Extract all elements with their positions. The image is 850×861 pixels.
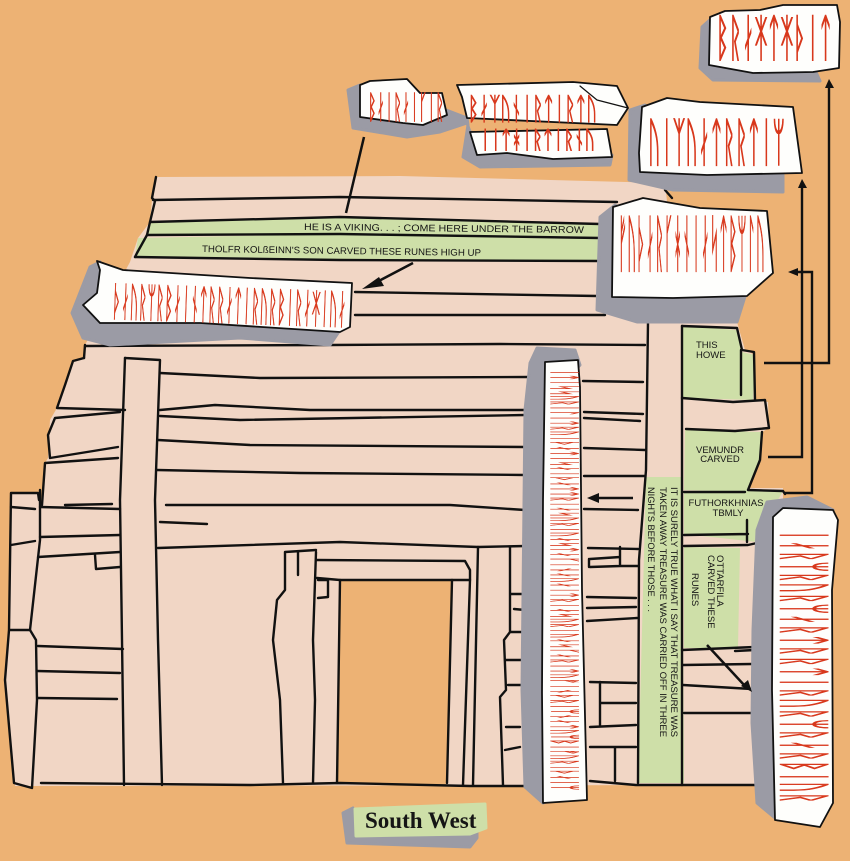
- arrow: centre stone: [587, 493, 633, 503]
- label: vemundr carved: CARVED: [700, 454, 740, 465]
- label: ottarfila: OTTARFILA: [714, 555, 725, 607]
- label: long vertical inscription: NIGHTS BEFORE THOSE . . .: [645, 487, 656, 612]
- label: vemundr carved: VEMUNDR: [696, 445, 744, 456]
- wall outline drawing: [5, 177, 785, 788]
- wall: South West elevation: [5, 176, 783, 786]
- label: long vertical inscription: IT IS SURELY TRUE WHAT I SAY THAT TREASURE WAS: [668, 487, 679, 737]
- label: ottarfila: CARVED THESE: [705, 555, 716, 629]
- arrow: ottarfila: [707, 645, 752, 692]
- text: ᛒᛅᛁᚱᛅᛁᚴᛁᚱ: [368, 88, 444, 126]
- arrow: vemundr stone: [768, 179, 807, 457]
- rune stone: small upper: [360, 79, 447, 126]
- door opening: [337, 580, 451, 785]
- label: this howe: THIS: [696, 340, 718, 351]
- rune stone: broken upper: ᛁᛁᛏᚼᛁᚱᛏᛁᚱᚾᚢ: [480, 126, 595, 154]
- rune stone: broken upper: ᛒᛅᛉᚢᚾᛁᚱᛏᛁᚱᛏᚢ: [468, 92, 597, 127]
- inscription: viking: HE IS A VIKING. . . ; COME HERE UNDER THE BARROW: [304, 222, 584, 236]
- green band: viking: [147, 217, 610, 238]
- green panel: this howe: [683, 326, 755, 400]
- rune stone: vemundr: [639, 98, 802, 175]
- green panel: futhork: [684, 490, 783, 542]
- label: ottarfila: RUNES: [689, 573, 700, 606]
- arrow: tholfr: [362, 263, 413, 289]
- caption: South West: [355, 804, 486, 836]
- green panel: long inscription: [638, 477, 684, 783]
- label: long vertical inscription: TAKEN AWAY TREASURE WAS CARRIED OFF IN THREE: [657, 487, 668, 737]
- label: futhork: FUTHORKHNIAS: [689, 498, 763, 509]
- caption: South West: South West: [365, 808, 477, 833]
- inscription: tholfr: THOLFR KOLßEINN'S SON CARVED THESE RUNES HIGH UP: [202, 244, 481, 259]
- green band: tholfr: [135, 234, 610, 261]
- green panel: ottarfila: [684, 547, 740, 648]
- label: this howe: HOWE: [696, 350, 726, 361]
- rune stone: broken upper: [457, 82, 628, 159]
- rune stone: tholfr: [83, 261, 352, 333]
- arrow: this howe to top stone: [764, 79, 834, 363]
- label: long vertical inscription: [645, 487, 679, 737]
- green panel: vemundr: [684, 430, 762, 492]
- label: ottarfila: [689, 555, 725, 629]
- arrow: futhork stone: [785, 268, 812, 493]
- leader line: viking: [346, 137, 364, 213]
- text: ᚦᛅᚢᚱᛘᚱᛒᛅᛁᚾᛏᚱᚱᛅᛏᛁᚱᚢᚱᛒᛁᚱᛅᛡᛁᚢᛅ: [112, 279, 347, 333]
- label: futhork: TBMLY: [713, 508, 744, 519]
- rune stone: futhork: [612, 198, 773, 298]
